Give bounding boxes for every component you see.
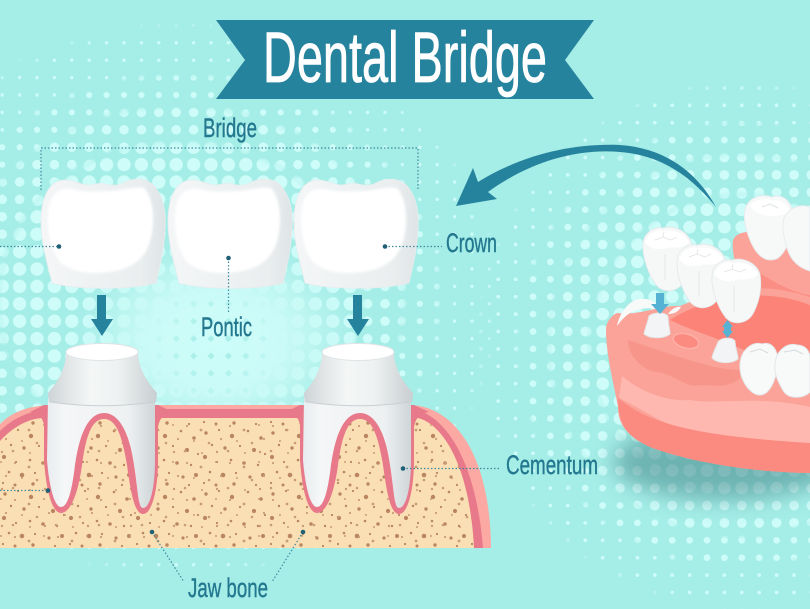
- denture shadow: [613, 424, 810, 500]
- cementum label: Cementum: [506, 450, 598, 480]
- bridge crowns: [41, 179, 418, 288]
- title: Dental Bridge: [263, 19, 547, 98]
- arrow down left: [91, 295, 113, 336]
- abutment left: [644, 313, 670, 338]
- jaw bone label: Jaw bone: [188, 573, 268, 603]
- title banner: [216, 19, 594, 99]
- upper teeth: [744, 196, 810, 271]
- bridge arrows: [651, 293, 733, 338]
- crown pontic: [168, 179, 292, 288]
- gum outer: [0, 405, 491, 548]
- crown left: [41, 179, 165, 288]
- gum inner floor: [670, 296, 810, 368]
- bone speckles: [0, 418, 474, 548]
- halftone dots: right: [479, 86, 810, 594]
- bone: [0, 418, 474, 548]
- jaw bone leaders: [150, 530, 305, 582]
- lower molars: [740, 343, 810, 397]
- crown label: Crown: [446, 228, 497, 258]
- bone fine speckles: [0, 418, 474, 548]
- socket: [672, 331, 700, 351]
- background glow: [0, 150, 500, 500]
- bridge label: Bridge: [203, 113, 257, 143]
- cementum leader right: [401, 466, 501, 471]
- crown leader left: [0, 244, 61, 249]
- pontic label: Pontic: [201, 312, 252, 342]
- gum light band: [619, 376, 810, 443]
- abutment right: [712, 338, 738, 363]
- centre diamond dots: [156, 288, 266, 394]
- upper gum shade: [752, 268, 810, 345]
- crown leader right: [383, 244, 442, 249]
- halftone dots: left: [0, 24, 491, 566]
- lower gum: [606, 288, 810, 473]
- crown right: [294, 179, 418, 288]
- gum lower band: [618, 398, 810, 473]
- abutment tooth right: [286, 344, 429, 514]
- cementum leader left: [0, 488, 50, 493]
- small front teeth: [617, 299, 681, 326]
- dental bridge crowns: [643, 227, 761, 323]
- bridge bracket: [41, 148, 418, 190]
- curved arrow: [456, 145, 716, 207]
- gum inner: [0, 409, 483, 548]
- pontic leader: [226, 256, 231, 314]
- denture illustration: [606, 196, 810, 500]
- upper gum: [733, 232, 810, 340]
- abutment tooth left: [30, 344, 173, 514]
- gum scallops: [628, 340, 740, 386]
- jaw cross-section: [0, 405, 491, 548]
- arrow down right: [347, 295, 369, 336]
